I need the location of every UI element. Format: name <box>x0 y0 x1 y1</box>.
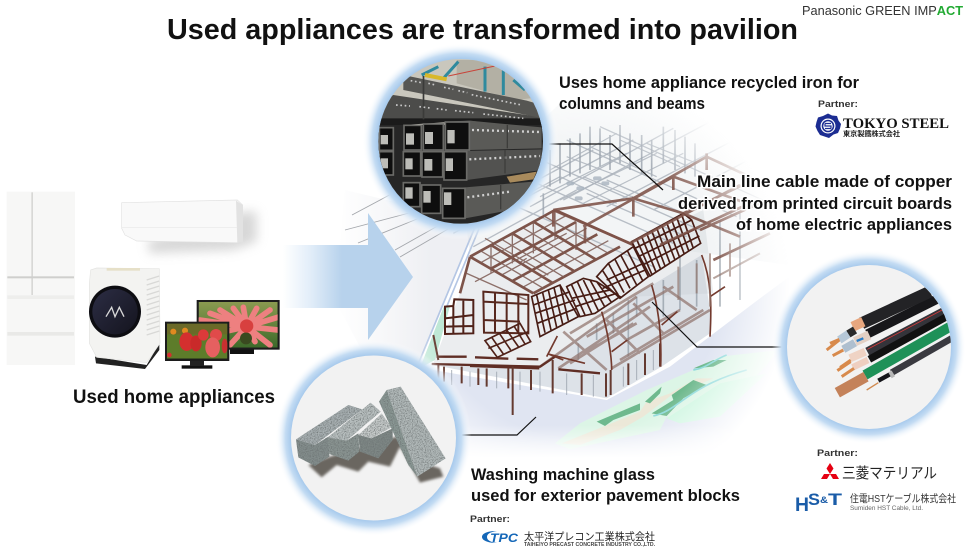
text: iron caption: Uses home appliance recycled iron for <box>559 74 860 92</box>
plaza guide lines <box>345 192 455 257</box>
photo circle: blocks <box>291 356 456 520</box>
lower dormer <box>485 323 531 357</box>
logo: Sumiden HST Cable: T <box>828 490 843 509</box>
title: Used appliances are transformed into pavilion <box>167 14 798 46</box>
ground fade <box>440 425 810 485</box>
leader line: iron <box>543 144 663 190</box>
text: cable caption: of home electric appliances <box>736 216 952 234</box>
panel: pavement block photo <box>276 340 472 536</box>
arrow: appliances to pavilion <box>283 213 413 340</box>
front perimeter beam <box>432 357 600 373</box>
text: iron caption <box>559 74 860 113</box>
lower plaza <box>436 290 772 448</box>
text: pavement caption: Washing machine glass <box>471 466 655 484</box>
text: cable caption <box>678 173 953 234</box>
icon: television front <box>165 322 229 369</box>
logo: TPC: TPC <box>490 531 518 545</box>
logo: TPC <box>482 530 656 548</box>
photo: blocks <box>296 387 446 483</box>
halo: blocks <box>276 340 472 536</box>
roof grid beams <box>460 210 633 293</box>
panel: used home appliances <box>7 192 280 369</box>
text: cable caption: Main line cable made of copper <box>697 173 953 191</box>
wireframe <box>453 120 780 267</box>
columns <box>433 335 660 415</box>
halo: cable <box>772 250 966 444</box>
pavilion structure illustration <box>420 122 772 448</box>
text: pavement caption: used for exterior pavement blocks <box>471 487 740 505</box>
icon: refrigerator <box>7 192 75 365</box>
brand label: Panasonic GREEN IMPACT <box>802 3 963 18</box>
text: iron caption: columns and beams <box>559 95 705 113</box>
icon: washing machine <box>89 268 160 369</box>
roof dormer rows <box>532 213 701 337</box>
icon: television rear <box>197 300 280 354</box>
text: used home appliances: Used home appliances <box>73 387 275 408</box>
text: pavement caption <box>471 466 740 505</box>
panel: cable photo <box>772 250 966 444</box>
green edge <box>422 306 450 364</box>
lower roof slope <box>540 283 710 370</box>
logo: Tokyo Steel: TOKYO STEEL <box>843 116 949 132</box>
photo: steel tubes <box>377 57 547 227</box>
partner label: pavement: Partner: <box>470 514 510 525</box>
front frame panel centre <box>483 292 528 333</box>
logo: Tokyo Steel: 東京製鐵株式会社 <box>843 129 900 138</box>
upper wire uprights <box>543 125 695 215</box>
logo: Sumiden HST Cable: & <box>820 495 829 505</box>
upper brown beams <box>553 153 770 260</box>
facade mullions <box>452 350 653 397</box>
text: cable caption: derived from printed circuit boards <box>678 195 952 213</box>
logo: Mitsubishi Materials: 三菱マテリアル <box>842 465 937 482</box>
upper wire grid <box>540 133 697 203</box>
right lower frame <box>678 243 760 307</box>
partner label: iron: Partner: <box>818 99 858 110</box>
logo: TPC: 太平洋プレコン工業株式会社 <box>524 530 655 543</box>
landscape garden <box>560 354 747 445</box>
glass facade <box>433 255 710 398</box>
leader line: blocks <box>450 417 536 435</box>
left plaza <box>335 190 478 385</box>
arched columns <box>547 255 725 370</box>
logo: Sumiden HST Cable: H <box>795 495 809 516</box>
site edge <box>417 227 479 369</box>
photo circle: cable <box>787 265 951 429</box>
logo: Sumiden HST Cable: S <box>808 490 820 509</box>
logo: Mitsubishi Materials <box>821 463 937 482</box>
logo: Sumiden HST Cable <box>795 490 956 516</box>
icon: air conditioner <box>122 200 257 253</box>
logo: Sumiden HST Cable: Sumiden HST Cable, Ltd. <box>850 505 923 512</box>
halo: iron <box>362 44 558 240</box>
partner label: cable: Partner: <box>817 448 858 459</box>
logo: Tokyo Steel <box>816 114 949 138</box>
logo: Sumiden HST Cable: 住電HSTケーブル株式会社 <box>850 492 956 505</box>
front frame panel left <box>445 299 473 334</box>
panel: recycled iron photo <box>362 44 558 240</box>
logo: TPC: TAIHEIYO PRECAST CONCRETE INDUSTRY CO.,LTD. <box>524 542 656 548</box>
photo: cables <box>827 292 952 393</box>
upper wire nodes <box>568 178 607 198</box>
roof secondary beams <box>467 210 608 300</box>
upper wireframe and beams <box>540 125 770 307</box>
wireframe uprights <box>578 213 740 360</box>
leader line: cable <box>652 302 790 347</box>
